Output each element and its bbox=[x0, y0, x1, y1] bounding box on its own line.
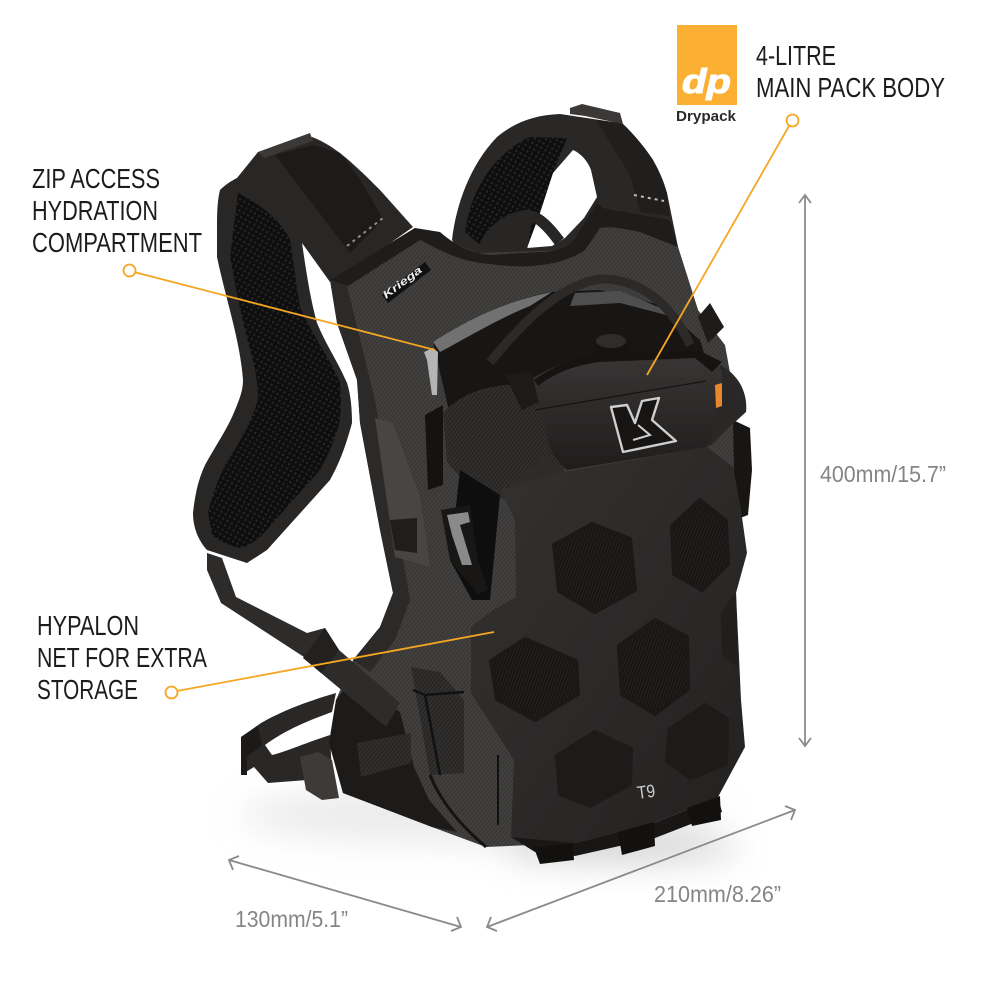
dimension arrow: height: 400mm/15.7” bbox=[820, 461, 946, 487]
side buckle bbox=[441, 470, 500, 600]
dark lower-left hip section bbox=[329, 680, 457, 832]
K logo bbox=[611, 398, 676, 452]
rear right shoulder strap arch bbox=[452, 104, 698, 310]
ground shadow bbox=[240, 785, 740, 864]
hydration compartment opening and zip bbox=[424, 279, 724, 415]
roll-top side pocket bbox=[443, 372, 565, 505]
drypack top flap bbox=[533, 351, 746, 470]
mesh hexagon: right edge bbox=[721, 592, 738, 668]
dimension arrow: width bbox=[487, 806, 795, 931]
callout: zip access hydration compartment: COMPARTMENT bbox=[32, 227, 202, 258]
left padded shoulder harness bbox=[193, 133, 413, 563]
orange tag bbox=[715, 383, 722, 408]
icon: Drypack badge bbox=[676, 25, 737, 125]
right-side buckles bbox=[733, 420, 752, 520]
dimension arrow: depth: 130mm/5.1” bbox=[235, 906, 348, 932]
callout: hypalon net for extra storage: STORAGE bbox=[37, 674, 138, 705]
top yoke band and piping bbox=[330, 203, 678, 286]
backpack illustration bbox=[193, 104, 752, 864]
mesh hexagon: middle left bbox=[491, 639, 578, 720]
callout: 4-litre main pack body bbox=[647, 40, 945, 375]
mesh hexagon: lower left bbox=[557, 732, 631, 806]
mesh hexagon: middle right bbox=[619, 620, 688, 714]
roll-top closure valve bbox=[593, 334, 629, 357]
icon: Drypack badge: dp bbox=[682, 63, 731, 101]
T9 mark: T9 bbox=[636, 781, 656, 803]
callout: zip access hydration compartment bbox=[32, 163, 435, 350]
lower adjustment strap bbox=[207, 553, 400, 727]
front moulded panel bbox=[471, 447, 747, 843]
grab handle bbox=[478, 210, 564, 250]
waist belt and buckle bbox=[241, 693, 339, 800]
callout: hypalon net for extra storage bbox=[37, 610, 494, 705]
callout: zip access hydration compartment: HYDRATION bbox=[32, 195, 158, 226]
bottom attachment loops bbox=[511, 796, 722, 864]
callout: hypalon net for extra storage: NET FOR EXTRA bbox=[37, 642, 207, 673]
callout: zip access hydration compartment: ZIP ACCESS bbox=[32, 163, 160, 194]
dimension arrow: width: 210mm/8.26” bbox=[654, 881, 781, 907]
dimension arrow: depth bbox=[229, 856, 461, 932]
Kriega brand tag: Kriega bbox=[381, 264, 425, 301]
callout: hypalon net for extra storage: HYPALON bbox=[37, 610, 139, 641]
mesh hexagon: lower right bbox=[667, 705, 727, 778]
dimension arrow: height bbox=[799, 195, 946, 746]
callout: 4-litre main pack body: 4-LITRE bbox=[756, 40, 836, 71]
callout: 4-litre main pack body: MAIN PACK BODY bbox=[756, 72, 945, 103]
lower side pocket bbox=[411, 667, 464, 775]
mesh hexagon: top right bbox=[672, 500, 728, 590]
Kriega brand tag bbox=[381, 262, 431, 303]
mesh hexagon: top left bbox=[554, 524, 635, 612]
main pack side body bbox=[329, 208, 735, 847]
icon: Drypack badge: Drypack bbox=[676, 109, 737, 125]
